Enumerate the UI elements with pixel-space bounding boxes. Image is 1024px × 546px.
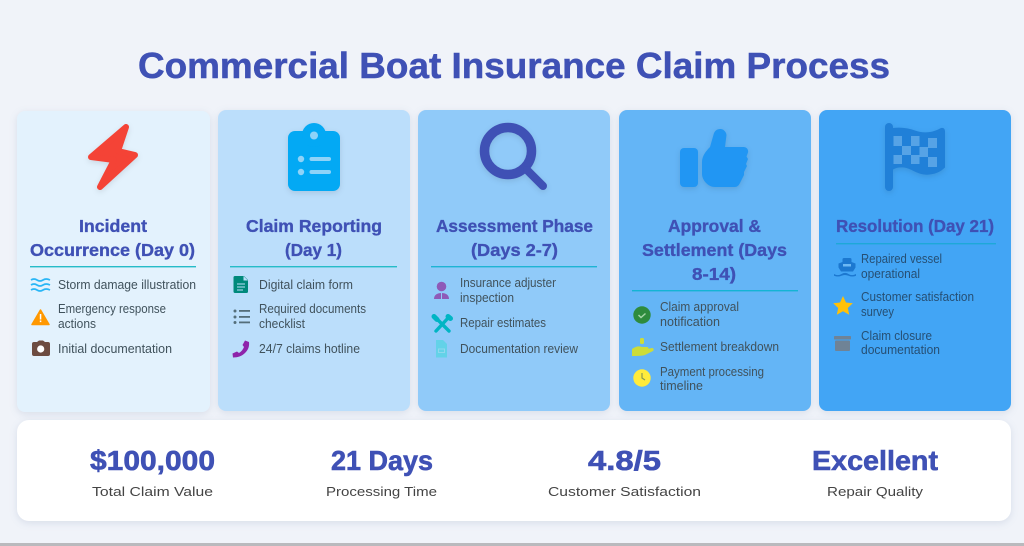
text: payment processing: timeline xyxy=(660,379,703,393)
stat: customer satisfaction xyxy=(548,445,701,499)
panel: summary statistics xyxy=(17,420,1011,521)
stat: processing time: Processing Time xyxy=(326,484,437,499)
text: customer satisfaction: survey xyxy=(861,305,895,319)
icon: clock xyxy=(633,369,651,387)
heading: incident occurrence: Occurrence (Day 0) xyxy=(30,240,195,260)
heading: approval and settlement: Settlement (Days xyxy=(642,240,787,260)
icon: light document xyxy=(436,340,447,358)
heading: approval and settlement xyxy=(642,216,787,284)
icon: ship xyxy=(834,258,856,277)
text: required documents: Required documents xyxy=(259,302,366,316)
icon: clipboard xyxy=(288,123,340,191)
text: emergency response xyxy=(58,302,166,331)
icon: archive box xyxy=(834,336,851,351)
text: required documents: checklist xyxy=(259,317,305,331)
panel: incident occurrence xyxy=(17,111,210,412)
text: claim closure: documentation xyxy=(861,343,940,357)
heading: claim reporting: Claim Reporting xyxy=(246,216,382,236)
text: claim closure: Claim closure xyxy=(861,329,932,343)
text: claim approval: notification xyxy=(660,315,720,329)
stat: processing time: 21 Days xyxy=(331,445,433,476)
text: documentation review: Documentation review xyxy=(460,342,579,356)
heading: assessment phase: Assessment Phase xyxy=(436,216,593,236)
text: claim approval: Claim approval xyxy=(660,300,739,314)
stat: total claim value xyxy=(90,445,215,499)
text: claim approval xyxy=(660,300,739,329)
heading: assessment phase xyxy=(436,216,593,260)
icon: phone xyxy=(232,340,249,358)
icon: thumbs up xyxy=(680,129,748,187)
stat: repair quality: Excellent xyxy=(812,445,938,476)
icon: list xyxy=(234,310,250,324)
text: payment processing: Payment processing xyxy=(660,365,764,379)
stat: total claim value: $100,000 xyxy=(90,445,215,476)
icon: magnifying glass xyxy=(484,128,543,186)
stat: repair quality xyxy=(812,445,938,499)
text: insurance adjuster: inspection xyxy=(460,291,514,305)
text: repaired vessel: Repaired vessel xyxy=(861,252,942,266)
stat: total claim value: Total Claim Value xyxy=(92,484,213,499)
heading: claim reporting xyxy=(246,216,382,260)
icon: camera xyxy=(32,340,50,356)
panel: resolution xyxy=(819,110,1011,411)
icon: hand with coin xyxy=(632,338,654,356)
text: initial documentation: Initial documentation xyxy=(58,342,172,356)
heading: resolution: Resolution (Day 21) xyxy=(836,216,994,236)
stat: repair quality: Repair Quality xyxy=(827,484,924,499)
text: emergency response: Emergency response xyxy=(58,302,166,316)
icon: tools xyxy=(434,316,450,331)
text: insurance adjuster xyxy=(460,276,556,305)
icon: check circle xyxy=(633,306,651,324)
icon: waves xyxy=(31,279,50,291)
text: claim closure xyxy=(861,329,940,357)
icon: checkered flag xyxy=(885,123,945,191)
panel: assessment phase xyxy=(418,110,610,411)
stat: processing time xyxy=(326,445,437,499)
heading: incident occurrence: Incident xyxy=(79,216,147,236)
stat: customer satisfaction: 4.8/5 xyxy=(588,445,661,476)
icon: warning xyxy=(32,310,49,324)
text: customer satisfaction: Customer satisfaction xyxy=(861,290,974,304)
icon: document green xyxy=(234,276,248,293)
text: customer satisfaction xyxy=(861,290,974,319)
text: repaired vessel: operational xyxy=(861,267,920,281)
heading: approval and settlement: 8-14) xyxy=(692,264,736,284)
text: repair estimates: Repair estimates xyxy=(460,316,546,330)
stat: customer satisfaction: Customer Satisfaction xyxy=(548,484,701,499)
icon: star xyxy=(833,296,853,315)
heading: approval and settlement: Approval & xyxy=(668,216,761,236)
text: settlement breakdown: Settlement breakdown xyxy=(660,340,779,354)
text: repaired vessel xyxy=(861,252,942,281)
icon: lightning bolt xyxy=(91,127,135,187)
panel: claim reporting xyxy=(218,110,410,411)
heading: incident occurrence xyxy=(30,216,195,260)
text: digital claim form: Digital claim form xyxy=(259,278,353,292)
heading: claim reporting: (Day 1) xyxy=(285,240,342,260)
icon: adjuster person xyxy=(434,282,449,299)
title: Commercial Boat Insurance Claim Process xyxy=(138,45,890,86)
text: insurance adjuster: Insurance adjuster xyxy=(460,276,556,290)
text: required documents xyxy=(259,302,366,331)
text: emergency response: actions xyxy=(58,317,96,331)
text: hotline: 24/7 claims hotline xyxy=(259,342,360,356)
heading: assessment phase: (Days 2-7) xyxy=(471,240,558,260)
text: storm damage: Storm damage illustration xyxy=(58,278,196,292)
text: payment processing xyxy=(660,365,764,393)
panel: approval and settlement xyxy=(619,110,811,411)
